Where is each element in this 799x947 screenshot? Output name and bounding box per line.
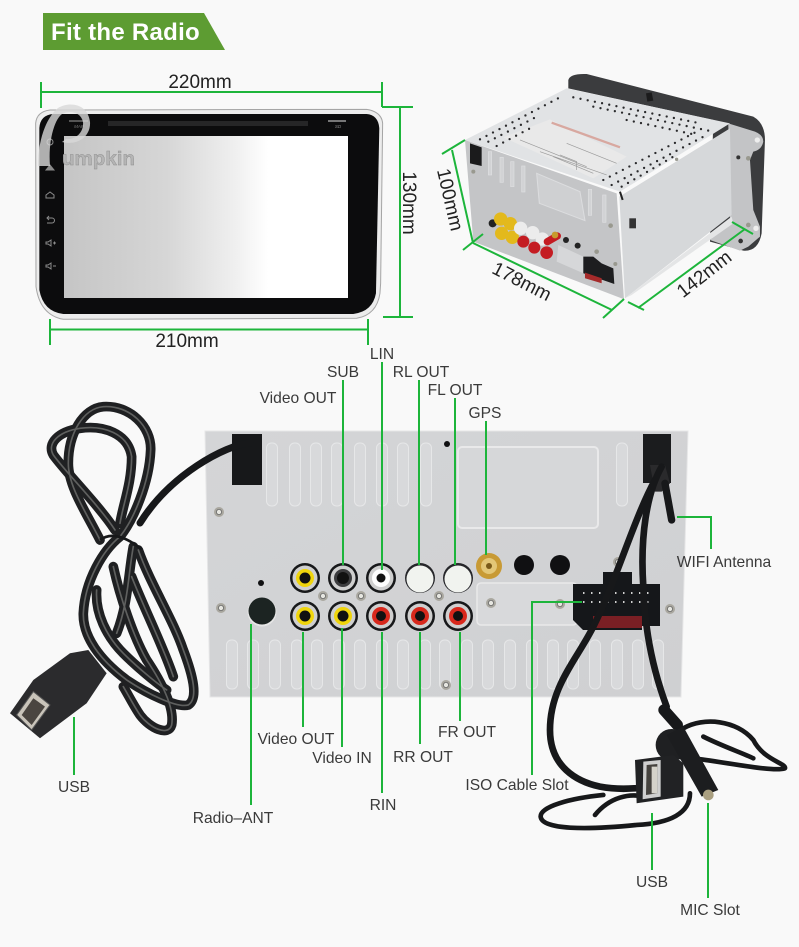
raised plate: [458, 447, 598, 528]
left usb cable: [10, 407, 250, 738]
Pumpkin watermark: umpkin: [62, 149, 135, 170]
fl out capped jack: [443, 563, 473, 593]
label: USB left: USB: [58, 779, 90, 796]
label: ISO Cable Slot: ISO Cable Slot: [465, 777, 569, 794]
dimension: 210mm width: [50, 319, 368, 352]
label: LIN: LIN: [370, 346, 394, 363]
dimension: 220mm width: [41, 72, 382, 108]
title banner: [43, 13, 225, 50]
label: GPS: GPS: [469, 405, 501, 422]
rear panel of radio: [205, 431, 688, 697]
screws: [214, 507, 675, 690]
label: Radio-ANT: Radio–ANT: [193, 810, 274, 827]
upper ventilation slots: [266, 443, 628, 506]
label: USB left: [58, 717, 90, 796]
left cable clip: [232, 434, 262, 485]
dimension: 178mm edge: [473, 243, 624, 318]
right cable with usb and mic connectors: [541, 465, 785, 828]
rl out capped jack: [405, 563, 435, 593]
rr out red jack: [405, 601, 435, 631]
fr out red jack: [443, 601, 473, 631]
label: USB right: USB: [636, 874, 668, 891]
sub black jack: [328, 563, 358, 593]
label: FL OUT: FL OUT: [428, 382, 483, 399]
label: Video IN: Video IN: [312, 750, 372, 767]
dimension: 130mm height: [382, 107, 419, 317]
plugged holes: [258, 441, 570, 586]
label: FR OUT: [438, 632, 496, 741]
label: WIFI Antenna: [677, 517, 772, 571]
rin red jack: [366, 601, 396, 631]
label: WIFI Antenna: WIFI Antenna: [677, 554, 772, 571]
label: Video OUT bottom: [258, 632, 335, 748]
label: Video IN: [312, 628, 372, 767]
label: USB right: [636, 813, 668, 891]
front view of radio: SD: [335, 124, 342, 129]
video in yellow jack: [328, 601, 358, 631]
Pumpkin watermark: [38, 105, 135, 170]
label: Video OUT bottom: Video OUT: [258, 731, 335, 748]
dimension: 100mm depth edge: [432, 140, 483, 250]
title banner: Fit the Radio: [51, 19, 200, 46]
video out yellow jack: [290, 563, 320, 593]
video out yellow jack lower: [290, 601, 320, 631]
label: RR OUT: [393, 632, 453, 766]
dimension: 130mm height: 130mm: [398, 171, 419, 235]
dimension: 178mm edge: 178mm: [489, 258, 554, 306]
dimension: 142mm edge: 142mm: [673, 247, 736, 302]
lower ventilation slots: [226, 640, 664, 689]
label: ISO Cable Slot: [465, 602, 582, 794]
label: SUB: SUB: [327, 364, 359, 381]
radio antenna socket: [248, 598, 276, 626]
iso connector: [573, 572, 660, 630]
right cable clip: [643, 434, 671, 483]
label: Video OUT top: Video OUT: [260, 390, 337, 407]
gps gold connector: [476, 553, 502, 579]
front view of radio: MAP: [74, 124, 84, 129]
dimension: 220mm width: 220mm: [168, 72, 232, 93]
label: RL OUT: RL OUT: [393, 364, 450, 381]
label: MIC Slot: [680, 803, 741, 919]
front view of radio: [36, 109, 383, 319]
rear three-quarter view of radio: [465, 74, 765, 299]
lower plate: [477, 583, 577, 625]
label: MIC Slot: MIC Slot: [680, 902, 741, 919]
dimension: 100mm depth edge: 100mm: [432, 167, 467, 233]
display screen: [64, 136, 348, 298]
label: RIN: RIN: [370, 797, 396, 814]
label: FR OUT: FR OUT: [438, 724, 496, 741]
lin white jack: [366, 563, 396, 593]
dimension: 142mm edge: [628, 222, 753, 310]
dimension: 210mm width: 210mm: [155, 331, 219, 352]
label: RR OUT: RR OUT: [393, 749, 453, 766]
